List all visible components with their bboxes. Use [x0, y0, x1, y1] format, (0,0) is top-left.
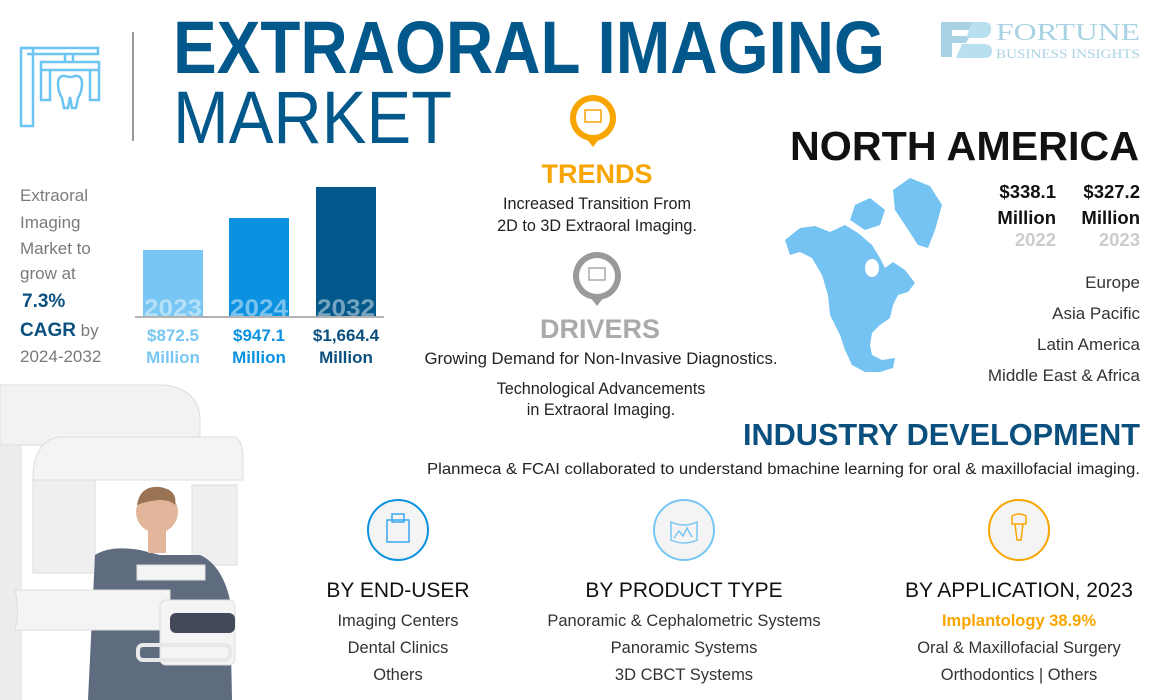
- column: by end-user: Others: [373, 666, 423, 684]
- logo: Fortune Business Insights: FORTUNE: [996, 20, 1140, 46]
- heading: drivers: DRIVERS: [540, 314, 660, 344]
- bar chart: Million: [146, 348, 200, 367]
- column: by application: [905, 500, 1133, 684]
- map: north america: [785, 178, 942, 372]
- icon: dental x-ray machine: [21, 48, 99, 126]
- column: by end-user: Imaging Centers: [337, 612, 459, 630]
- icon: drivers pin: [573, 252, 621, 306]
- bar chart: $947.1: [233, 326, 285, 345]
- column: by application: Orthodontics | Others: [941, 666, 1097, 684]
- bar chart: [135, 187, 384, 367]
- text: trends: [497, 195, 697, 235]
- text block: CAGR: Extraoral: [20, 186, 88, 205]
- bar chart: 2024: [230, 295, 289, 322]
- column: by product type: Panoramic & Cephalometric Systems: [547, 612, 821, 630]
- column: by end-user: BY END-USER: [326, 579, 470, 602]
- heading: trends: TRENDS: [541, 159, 653, 189]
- bar chart: $1,664.4: [313, 326, 380, 345]
- bar chart: $872.5: [147, 326, 199, 345]
- column: by application: Implantology 38.9%: [942, 612, 1096, 630]
- stats: north america values: [997, 181, 1140, 250]
- bar chart: Million: [232, 348, 286, 367]
- icon: trends pin: [570, 95, 616, 147]
- icon: dental implant: [989, 500, 1049, 560]
- list: regions: [988, 273, 1141, 385]
- list: regions: Europe: [1085, 273, 1140, 292]
- icon: dental clinic: [368, 500, 428, 560]
- title: [173, 6, 885, 159]
- stats: north america values: 2022: [1015, 229, 1056, 250]
- column: by end-user: [326, 500, 470, 684]
- text block: CAGR: 2024-2032: [20, 347, 101, 366]
- text block: CAGR: CAGR by: [20, 320, 99, 341]
- stats: north america values: Million: [997, 207, 1056, 228]
- text block: CAGR: Imaging: [20, 213, 80, 232]
- text: trends: 2D to 3D Extraoral Imaging.: [497, 217, 697, 235]
- icon: panoramic image: [654, 500, 714, 560]
- text: drivers: in Extraoral Imaging.: [527, 401, 675, 419]
- column: by product type: 3D CBCT Systems: [615, 666, 753, 684]
- photo: patient with extraoral imaging machine: [0, 385, 243, 700]
- text block: CAGR: Market to: [20, 239, 91, 258]
- column: by application: Oral & Maxillofacial Surgery: [917, 639, 1122, 657]
- text: drivers: Technological Advancements: [497, 380, 705, 398]
- text: industry development: Planmeca & FCAI collaborated to understand bmachine learning for oral & maxillofacial imaging.: [427, 461, 1140, 478]
- logo: Fortune Business Insights: [941, 20, 1140, 61]
- column: by product type: Panoramic Systems: [611, 639, 757, 657]
- text: drivers: [424, 350, 778, 419]
- title: MARKET: [173, 76, 452, 159]
- bar chart: 2023: [144, 295, 202, 322]
- list: regions: Latin America: [1037, 335, 1141, 354]
- logo: Fortune Business Insights: BUSINESS INSIGHTS: [996, 46, 1140, 61]
- stats: north america values: Million: [1081, 207, 1140, 228]
- stats: north america values: 2023: [1099, 229, 1140, 250]
- text block: CAGR: 7.3%: [22, 291, 65, 312]
- column: by end-user: Dental Clinics: [348, 639, 448, 657]
- heading: industry development: INDUSTRY DEVELOPMENT: [743, 417, 1140, 452]
- list: regions: Asia Pacific: [1052, 304, 1140, 323]
- column: by application: BY APPLICATION, 2023: [905, 579, 1133, 602]
- text: trends: Increased Transition From: [503, 195, 691, 213]
- bar chart: 2032: [317, 295, 375, 322]
- text: drivers: Growing Demand for Non-Invasive Diagnostics.: [424, 350, 778, 368]
- bar chart: Million: [319, 348, 373, 367]
- list: regions: Middle East & Africa: [988, 366, 1141, 385]
- heading: north america: NORTH AMERICA: [790, 123, 1139, 169]
- title: EXTRAORAL IMAGING: [173, 6, 885, 89]
- column: by product type: BY PRODUCT TYPE: [585, 579, 783, 602]
- column: by product type: [547, 500, 821, 684]
- text block: CAGR: grow at: [20, 264, 76, 283]
- stats: north america values: $327.2: [1083, 181, 1140, 202]
- text block: CAGR: [20, 186, 101, 366]
- stats: north america values: $338.1: [999, 181, 1056, 202]
